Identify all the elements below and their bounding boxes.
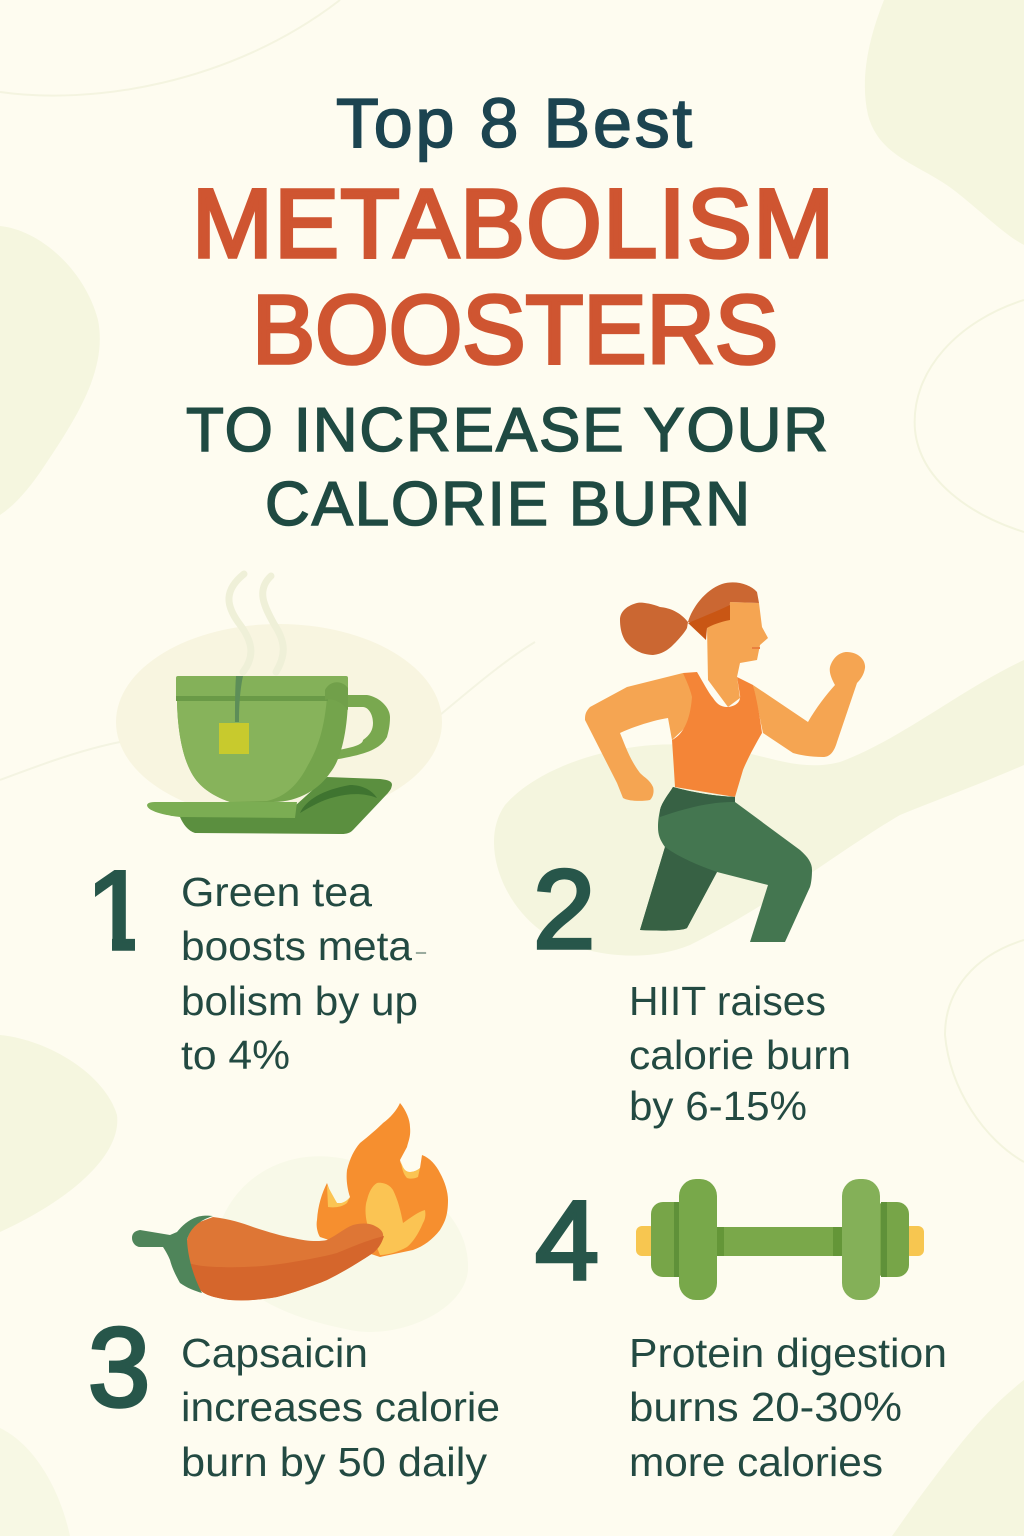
text: green tea: boosts meta: [181, 923, 412, 969]
text: capsaicin: increases calorie: [181, 1384, 500, 1430]
text: protein: [629, 1330, 947, 1485]
subtitle: to increase your: TO INCREASE YOUR: [186, 396, 828, 465]
title: Top 8 Best: Top 8 Best: [336, 84, 692, 162]
number 1: 1: [86, 848, 148, 973]
number 3: 3: [88, 1305, 150, 1430]
text: capsaicin: Capsaicin: [181, 1330, 368, 1376]
text: green tea: [181, 869, 428, 1078]
text: protein: burns 20-30%: [629, 1384, 902, 1430]
text: protein: more calories: [629, 1439, 883, 1485]
number 2: 2: [533, 847, 595, 972]
text: capsaicin: [181, 1330, 500, 1485]
icon: dumbbell: [636, 1179, 924, 1300]
text: capsaicin: burn by 50 daily: [181, 1439, 488, 1485]
text: HIIT: by 6-15%: [629, 1083, 807, 1129]
text: HIIT: [629, 978, 851, 1129]
icon: green tea cup: [116, 574, 442, 834]
title: BOOSTERS: BOOSTERS: [252, 275, 778, 384]
number 4: 4: [535, 1178, 599, 1303]
text: green tea: bolism by up: [181, 978, 418, 1024]
icon: runner: [585, 582, 865, 942]
text: protein: Protein digestion: [629, 1330, 947, 1376]
subtitle: calorie burn: CALORIE BURN: [265, 470, 750, 539]
text: HIIT: HIIT raises: [629, 978, 826, 1024]
text: HIIT: calorie burn: [629, 1032, 851, 1078]
title: METABOLISM: METABOLISM: [192, 169, 834, 278]
text: green tea: Green tea: [181, 869, 372, 915]
text: green tea: to 4%: [181, 1032, 290, 1078]
text: green tea: -: [414, 936, 428, 966]
icon: chili pepper with flame: [132, 1103, 468, 1332]
